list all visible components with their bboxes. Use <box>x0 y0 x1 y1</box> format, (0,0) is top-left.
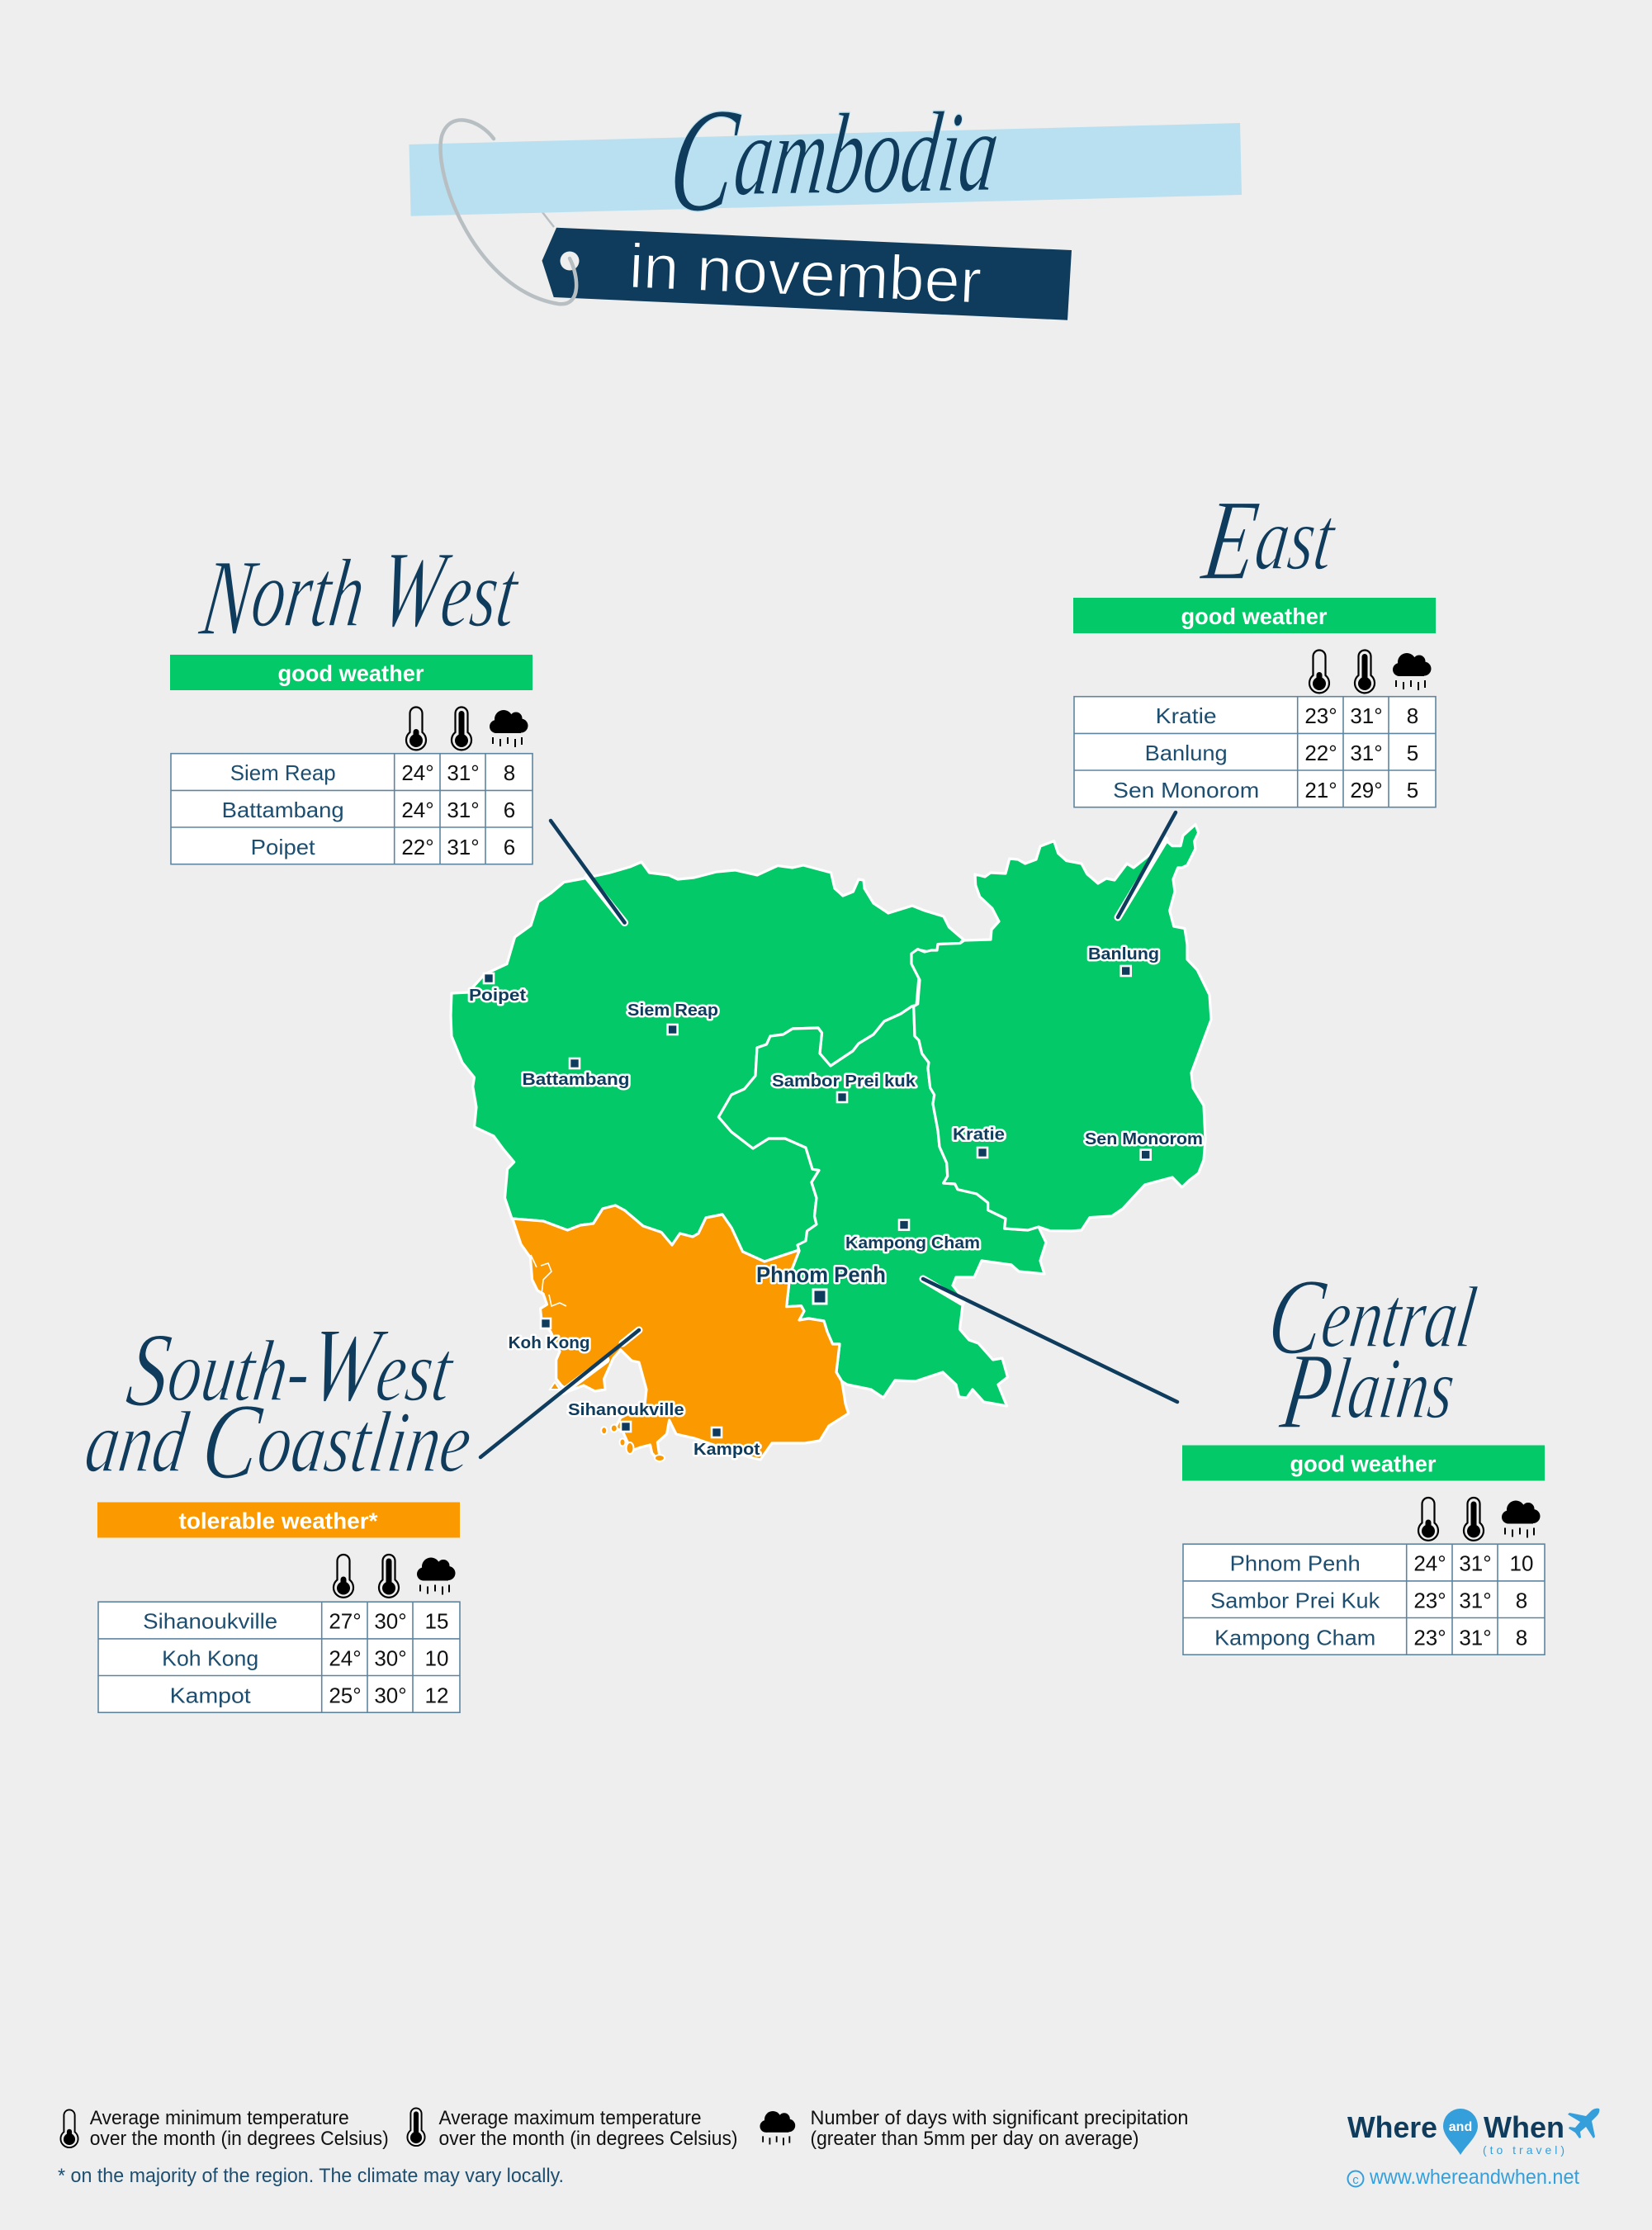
heading: South-West and Coastline: West <box>303 1306 481 1423</box>
heading: North West: West <box>372 529 558 650</box>
weather table: 12 <box>425 1683 448 1707</box>
region: East <box>911 825 1211 1231</box>
weather table: 23° <box>1304 703 1337 728</box>
weather table: Siem Reap <box>230 760 336 785</box>
city labels <box>469 945 1203 1459</box>
icons <box>406 707 528 750</box>
legend: minimum temperature <box>60 2107 389 2150</box>
weather table <box>98 1602 460 1712</box>
legend: maximum temperature <box>407 2107 738 2150</box>
weather table <box>1074 697 1436 807</box>
heading: South-West and Coastline: outh- <box>163 1323 317 1420</box>
icons <box>1418 1498 1541 1541</box>
weather table: 5 <box>1407 778 1418 803</box>
icons <box>1309 651 1432 693</box>
weather table: 31° <box>1350 703 1383 728</box>
weather table: 22° <box>1304 741 1337 765</box>
weather table: Kampot <box>170 1683 252 1707</box>
legend: maximum temperature: over the month (in degrees Celsius) <box>439 2128 738 2150</box>
light blue title band <box>409 123 1242 216</box>
weather table: 24° <box>1413 1551 1446 1575</box>
heading: Central Plains: entral <box>1316 1269 1482 1366</box>
weather table: Koh Kong <box>162 1646 258 1671</box>
region: Central Plains <box>718 1006 1046 1406</box>
weather table: 31° <box>1459 1588 1492 1613</box>
heading: South-West and Coastline: and <box>80 1394 211 1491</box>
weather table: 23° <box>1413 1588 1446 1613</box>
footnote: * on the majority of the region. The climate may vary locally. <box>58 2165 564 2187</box>
region: North West <box>451 862 963 1262</box>
copyright icon: c <box>1352 2173 1359 2187</box>
logo pin <box>1443 2109 1478 2155</box>
callout lines <box>480 812 1177 1457</box>
city labels: Sambor Prei kuk <box>772 1072 916 1091</box>
weather table: 10 <box>425 1646 448 1671</box>
weather table: Poipet <box>251 835 316 859</box>
heading: Central Plains: lains <box>1325 1340 1460 1437</box>
legend: minimum temperature: over the month (in degrees Celsius) <box>90 2128 389 2150</box>
heading: South-West and Coastline: C <box>195 1381 268 1502</box>
dark tag <box>542 228 1072 320</box>
heading: Central Plains: P <box>1275 1331 1340 1451</box>
callout: East <box>1118 812 1176 917</box>
islands <box>550 1382 665 1461</box>
weather table: 6 <box>504 835 515 859</box>
weather table <box>171 754 533 864</box>
heading: North West: orth <box>245 539 388 647</box>
logo: Where and When <box>1347 2109 1599 2189</box>
weather table: Phnom Penh <box>1230 1551 1361 1575</box>
weather table: 25° <box>329 1683 362 1707</box>
logo wordmark left: Where <box>1347 2110 1437 2144</box>
weather banner <box>1073 598 1436 633</box>
city labels: Siem Reap <box>627 1001 718 1020</box>
city labels: Sen Monorom <box>1085 1130 1203 1148</box>
city labels: Banlung <box>1088 945 1159 963</box>
heading: South-West and Coastline <box>78 1306 479 1502</box>
weather table: Sen Monorom <box>1113 778 1259 803</box>
callout: Central Plains <box>923 1279 1177 1402</box>
weather table: 27° <box>329 1608 362 1633</box>
logo plane <box>1568 2109 1599 2138</box>
legend <box>58 2107 1189 2187</box>
icons <box>334 1555 456 1598</box>
weather banner: good weather <box>1290 1451 1437 1476</box>
callout: North West <box>551 821 625 923</box>
weather banner <box>97 1503 460 1537</box>
weather table: 24° <box>401 798 434 822</box>
logo and: and <box>1449 2120 1472 2134</box>
heading: Central Plains <box>1261 1257 1484 1451</box>
weather table: 8 <box>504 760 515 785</box>
title block <box>409 73 1242 320</box>
weather table: 6 <box>504 798 515 822</box>
heading: South-West and Coastline: S <box>121 1311 178 1428</box>
weather table: 31° <box>1459 1625 1492 1650</box>
weather table: 24° <box>329 1646 362 1671</box>
city labels: Phnom Penh <box>756 1262 886 1287</box>
weather table: 24° <box>401 760 434 785</box>
line halos over the map <box>564 840 1165 1391</box>
panel: South-West and Coastline <box>78 1306 479 1712</box>
heading: North West: N <box>194 537 265 658</box>
weather table: 30° <box>374 1683 407 1707</box>
weather table: 31° <box>1459 1551 1492 1575</box>
map of Cambodia <box>451 825 1211 1461</box>
weather table: 8 <box>1516 1625 1527 1650</box>
city labels: Battambang <box>522 1071 629 1089</box>
subtitle: in november: in november <box>627 231 983 317</box>
weather table: 30° <box>374 1608 407 1633</box>
weather table: 31° <box>1350 741 1383 765</box>
weather table <box>1183 1544 1545 1655</box>
weather table: 31° <box>447 760 480 785</box>
website: www.whereandwhen.net <box>1369 2166 1579 2189</box>
city labels: Sihanoukville <box>568 1401 684 1419</box>
city labels: Kratie <box>953 1126 1005 1144</box>
legend: precipitation <box>760 2107 1189 2150</box>
weather table: 8 <box>1407 703 1418 728</box>
logo tagline: (to travel) <box>1483 2143 1564 2157</box>
tag hole <box>560 251 580 271</box>
legend: maximum temperature: Average maximum temperature <box>439 2107 702 2129</box>
panel: Central Plains <box>1182 1257 1545 1655</box>
logo wordmark right: When <box>1484 2110 1564 2144</box>
weather table: 29° <box>1350 778 1383 803</box>
weather table: Kratie <box>1156 703 1217 728</box>
weather banner <box>170 655 533 690</box>
heading: South-West and Coastline: oastline <box>252 1394 477 1491</box>
weather banner: tolerable weather* <box>178 1508 378 1534</box>
weather table: 15 <box>425 1608 448 1633</box>
region: South-West and Coastline <box>512 1205 849 1461</box>
legend: precipitation: Number of days with significant precipitation <box>811 2107 1189 2129</box>
title: Cambodia: C <box>661 78 747 244</box>
weather table: 21° <box>1304 778 1337 803</box>
panel: East <box>1073 477 1436 807</box>
weather table: 30° <box>374 1646 407 1671</box>
callout: South West <box>480 1330 639 1457</box>
weather table: 22° <box>401 835 434 859</box>
title: Cambodia: ambodia <box>728 88 1006 220</box>
city labels: Kampot <box>693 1441 760 1459</box>
weather table: Kampong Cham <box>1214 1625 1375 1650</box>
heading: Central Plains: C <box>1261 1257 1332 1377</box>
city markers <box>484 966 1151 1437</box>
weather table: Battambang <box>222 798 344 822</box>
tag string loop <box>441 120 576 304</box>
city labels: Koh Kong <box>509 1334 590 1352</box>
weather table: 5 <box>1407 741 1418 765</box>
weather table: Sihanoukville <box>143 1608 277 1633</box>
weather table: 23° <box>1413 1625 1446 1650</box>
weather banner <box>1182 1445 1545 1481</box>
weather table: 8 <box>1516 1588 1527 1613</box>
weather table: 10 <box>1510 1551 1533 1575</box>
weather table: 31° <box>447 835 480 859</box>
heading: East: ast <box>1250 487 1342 589</box>
city labels: Kampong Cham <box>845 1234 980 1252</box>
weather banner: good weather <box>1181 604 1328 629</box>
city labels: Poipet <box>469 987 526 1005</box>
weather table: Banlung <box>1145 741 1228 765</box>
weather table: Sambor Prei Kuk <box>1210 1588 1380 1613</box>
heading: East: E <box>1195 477 1266 604</box>
panel: North West <box>170 529 533 864</box>
copyright icon <box>1347 2171 1364 2187</box>
coastal inlets <box>531 1255 566 1306</box>
weather banner: good weather <box>277 660 424 686</box>
legend: minimum temperature: Average minimum temperature <box>90 2107 349 2129</box>
string behind band <box>542 212 554 227</box>
legend: precipitation: (greater than 5mm per day on average) <box>811 2128 1139 2150</box>
weather table: 31° <box>447 798 480 822</box>
